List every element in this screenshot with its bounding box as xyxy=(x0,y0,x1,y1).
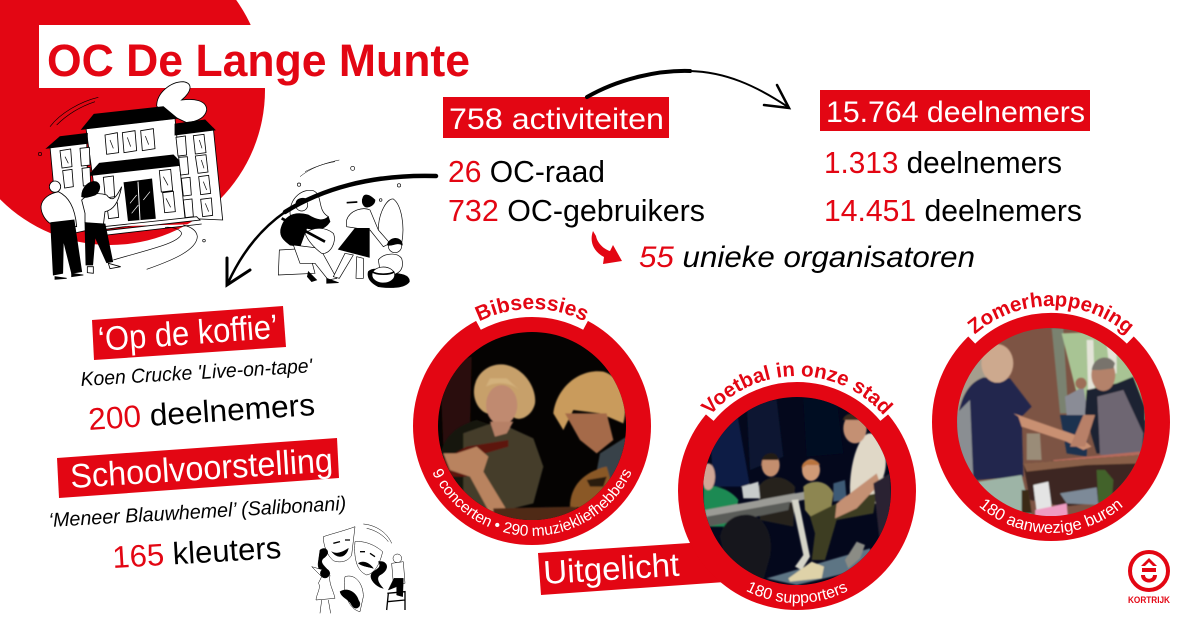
ring xyxy=(413,307,651,545)
ribbon: Uitgelicht xyxy=(538,541,725,595)
stat: 165 kleuters: 165 kleuters xyxy=(111,530,282,575)
panel: Schoolvoorstelling xyxy=(48,438,347,575)
illustration: musicians xyxy=(278,160,409,288)
logo: Kortrijk: KORTRIJK xyxy=(1128,595,1170,605)
label: Voetbal in onze stad: Voetbal in onze stad xyxy=(700,362,894,415)
caption: aanwezige buren: 180 aanwezige buren xyxy=(979,500,1123,535)
white label band xyxy=(478,311,586,324)
arrow: red small xyxy=(592,231,622,264)
subtitle: Meneer Blauwhemel: ‘Meneer Blauwhemel’ (Salibonani) xyxy=(48,493,347,532)
stat: 26 OC-raad: 26 OC-raad xyxy=(448,154,605,189)
photo circle: Bibsessies xyxy=(413,297,651,545)
white label band xyxy=(709,376,885,417)
illustration: theatre masks xyxy=(312,524,405,613)
ring xyxy=(678,372,916,610)
photo: musicians xyxy=(438,332,626,520)
stat: 14.451 deelnemers: 14.451 deelnemers xyxy=(824,193,1082,228)
photo: panel on stage xyxy=(700,395,894,589)
stat: 732 OC-gebruikers: 732 OC-gebruikers xyxy=(448,193,705,228)
ring xyxy=(932,303,1170,541)
arrow: to deelnemers xyxy=(587,71,789,108)
subtitle: Koen Crucke: Koen Crucke 'Live-on-tape' xyxy=(80,355,314,391)
stat: 200 deelnemers: 200 deelnemers xyxy=(87,387,316,437)
heading: Schoolvoorstelling: Schoolvoorstelling xyxy=(69,442,334,496)
heading: 758 activiteiten: 758 activiteiten xyxy=(449,103,664,136)
logo: Kortrijk xyxy=(1128,552,1170,605)
label: Bibsessies: Bibsessies xyxy=(474,297,588,321)
illustration: building with two people xyxy=(38,82,223,279)
photo: barbecue xyxy=(955,326,1149,520)
label: Zomerhappening: Zomerhappening xyxy=(967,292,1133,336)
red background circle xyxy=(0,0,265,245)
panel: Op de koffie xyxy=(80,306,316,437)
caption: supporters: 180 supporters xyxy=(746,582,848,606)
white label band xyxy=(971,307,1131,339)
ribbon: Uitgelicht: Uitgelicht xyxy=(542,546,680,591)
stat: 1.313 deelnemers: 1.313 deelnemers xyxy=(824,145,1062,180)
heading: 15.764 deelnemers: 15.764 deelnemers xyxy=(826,96,1085,129)
arrow: to activity details xyxy=(227,176,436,285)
photo circle: Zomerhappening xyxy=(932,292,1170,541)
caption: concerts: 9 concerten • 290 muziekliefhebbers xyxy=(433,468,631,536)
heading: Op de koffie: ‘Op de koffie’ xyxy=(97,308,279,359)
stat: 55 unieke organisatoren: 55 unieke organisatoren xyxy=(639,241,975,274)
title: OC De Lange Munte xyxy=(47,35,470,86)
photo circle: Voetbal in onze stad xyxy=(678,362,916,610)
